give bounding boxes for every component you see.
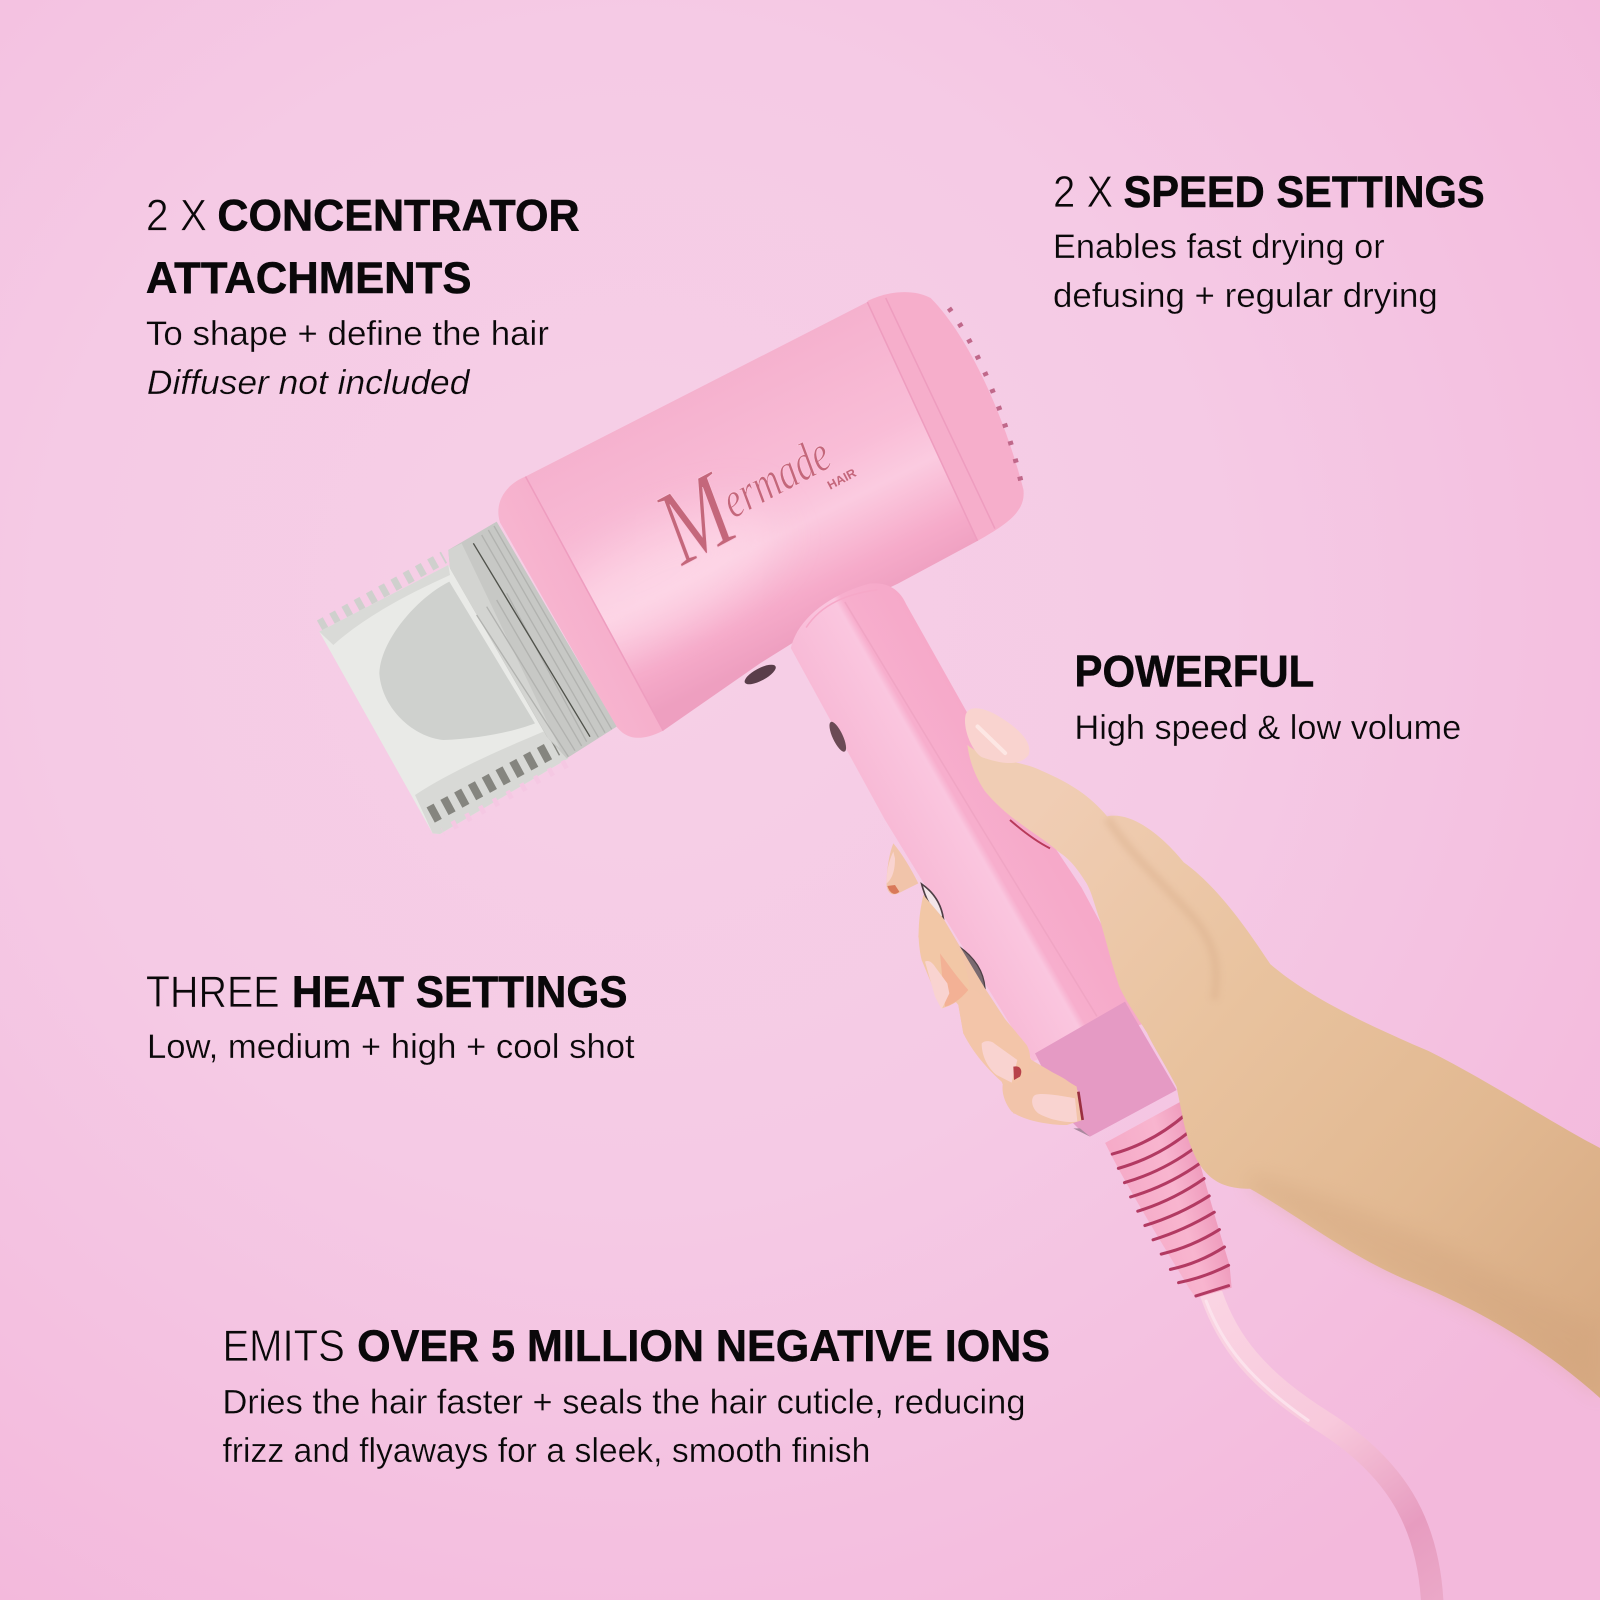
threaded collar <box>448 522 617 758</box>
thumb ridge shading <box>1107 818 1216 1000</box>
collar smooth inner band <box>448 543 560 748</box>
power cord <box>1206 1294 1433 1600</box>
callout: negative ions: frizz and flyaways for a sleek, smooth finish <box>222 1432 870 1470</box>
little fingernail <box>1032 1094 1077 1122</box>
callout: speed settings: SPEED SETTINGS <box>1123 166 1485 217</box>
callout: speed settings: Enables fast drying or <box>1053 228 1385 266</box>
nozzle top comb teeth <box>320 557 444 626</box>
callout: heat settings: THREE <box>146 966 280 1017</box>
handle buttons <box>922 884 943 918</box>
side button <box>742 661 778 688</box>
callout: speed settings <box>1053 166 1485 315</box>
main barrel body <box>526 302 978 731</box>
top fingernail <box>887 852 895 883</box>
logo: ermade <box>712 425 840 529</box>
callout: concentrator attachments: 2 X <box>146 190 207 241</box>
callout: negative ions: EMITS <box>222 1320 345 1371</box>
callout: powerful: POWERFUL <box>1074 646 1314 697</box>
collar ridges <box>477 526 612 757</box>
nozzle white plate <box>319 565 568 834</box>
plate top band shadow <box>319 565 450 645</box>
callout: heat settings: HEAT SETTINGS <box>292 966 628 1017</box>
nozzle dome <box>379 582 535 740</box>
nozzle bottom comb notches <box>443 763 568 831</box>
nozzle bottom comb slots <box>431 747 556 815</box>
hand and forearm <box>965 708 1600 1398</box>
logo: M <box>636 449 756 587</box>
ring fingernail <box>982 1041 1017 1083</box>
callout: powerful <box>1074 646 1461 747</box>
arm underside shading <box>1250 1173 1600 1398</box>
middle finger <box>919 895 970 1008</box>
logo <box>636 390 867 587</box>
concentrator nozzle <box>319 522 617 834</box>
callout: concentrator attachments: CONCENTRATOR <box>217 190 580 241</box>
strain relief spring <box>1105 1100 1232 1298</box>
lower handle, collar and fingers <box>887 820 1177 1137</box>
top fingertip <box>887 843 918 894</box>
callout: negative ions: Dries the hair faster + seals the hair cuticle, reducing <box>222 1383 1026 1421</box>
rear vent ridges <box>949 308 1021 484</box>
callout: concentrator attachments: ATTACHMENTS <box>146 252 471 303</box>
hair dryer handle <box>791 583 1153 1061</box>
callout: speed settings: 2 X <box>1053 166 1113 217</box>
ring finger <box>958 989 1030 1085</box>
handle base collar <box>1035 1002 1177 1137</box>
rear cap <box>867 292 1024 541</box>
palm red reflection <box>1010 820 1050 848</box>
callout: heat settings: Low, medium + high + cool shot <box>147 1028 635 1066</box>
callout: speed settings: defusing + regular drying <box>1053 277 1438 315</box>
logo: HAIR <box>825 466 859 493</box>
barrel highlight <box>578 509 754 650</box>
front band <box>498 477 663 738</box>
nozzle bottom band <box>415 732 568 834</box>
thumb nail highlight <box>978 727 1005 753</box>
collar seam <box>473 543 590 737</box>
callout: concentrator attachments: To shape + define the hair <box>146 315 549 353</box>
callout: negative ions <box>222 1320 1050 1470</box>
little finger <box>1002 1070 1083 1125</box>
callout: powerful: High speed & low volume <box>1074 709 1461 747</box>
main hand and arm <box>967 745 1600 1398</box>
thumb nail <box>965 708 1029 763</box>
hair dryer barrel <box>498 292 1024 738</box>
callout: concentrator attachments: Diffuser not included <box>147 364 471 402</box>
callout: negative ions: OVER 5 MILLION NEGATIVE IONS <box>357 1320 1050 1371</box>
upper handle button <box>826 720 849 754</box>
middle fingernail <box>925 961 949 1009</box>
finger skin underlay <box>918 895 1081 1125</box>
callout: heat settings <box>146 966 635 1066</box>
callout: concentrator attachments <box>146 190 580 402</box>
